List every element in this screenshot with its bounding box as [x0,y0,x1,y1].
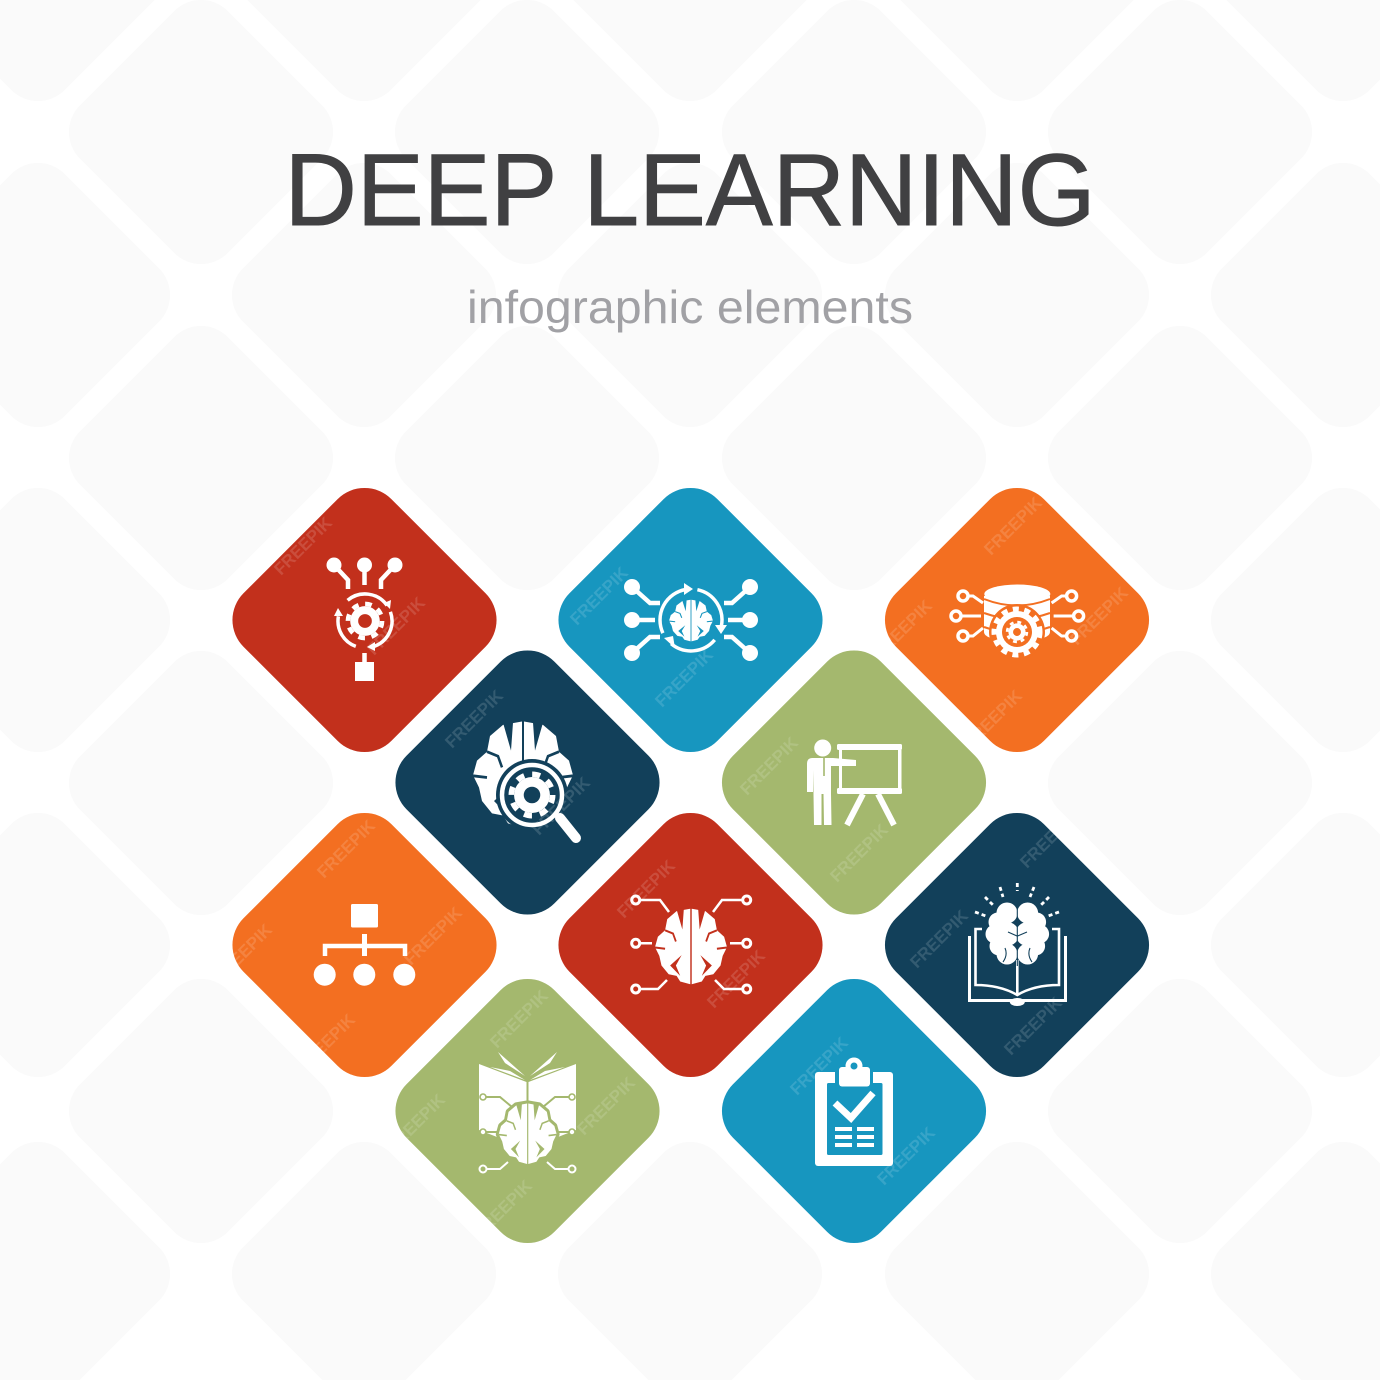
watermarks: FREEPIK [210,920,276,986]
watermarks: FREEPIK [313,816,379,882]
tile [706,635,1002,930]
watermarks: FREEPIK [1016,806,1082,872]
watermarks: FREEPIK [486,986,552,1052]
icon: brain under magnifier [473,721,576,838]
panel: dark brain book [869,797,1165,1093]
panel: green book brain [380,963,675,1259]
watermarks: FREEPIK [651,645,717,711]
panel: red process gear [217,472,512,768]
watermarks: FREEPIK [293,1010,359,1076]
panel: orange hierarchy [217,797,512,1093]
watermarks: FREEPIK [573,1073,639,1139]
watermarks: FREEPIK [870,596,936,662]
icon: brain over open book [970,883,1066,1006]
watermarks: FREEPIK [703,946,769,1012]
panel: dark brain search [380,635,675,930]
watermarks: FREEPIK [980,493,1046,559]
watermarks: FREEPIK [736,733,802,799]
panel: blue checklist [706,963,1002,1259]
watermarks: FREEPIK [566,563,632,629]
watermarks: FREEPIK [960,686,1026,752]
icon: brain with circuit lines [632,896,751,993]
tile [217,797,512,1093]
icon: gear with inputs and output [326,558,402,681]
tile [217,472,512,768]
icon: hierarchy chart [314,904,415,986]
watermarks: FREEPIK [906,906,972,972]
watermarks: FREEPIK [441,686,507,752]
panel: green presentation [706,635,1002,930]
watermarks: FREEPIK [786,1033,852,1099]
panel: orange database [869,472,1165,768]
tile [706,963,1002,1259]
watermarks: FREEPIK [826,820,892,886]
icon: presenter and board [807,740,902,825]
icon: clipboard checklist [815,1058,893,1166]
icon: brain cycle with nodes [624,579,758,661]
tile [869,472,1165,768]
watermarks: FREEPIK [873,1123,939,1189]
icon: database gear circuit [951,584,1084,660]
watermarks: FREEPIK [363,593,429,659]
subtitle: infographic elements [467,281,913,333]
watermarks: FREEPIK [1066,583,1132,649]
watermarks: FREEPIK [528,773,594,839]
tile [869,797,1165,1093]
watermarks: FREEPIK [613,856,679,922]
watermarks: FREEPIK [270,513,336,579]
watermarks: FREEPIK [1000,993,1066,1059]
watermarks [210,493,1132,1242]
watermarks: FREEPIK [470,1176,536,1242]
watermarks: FREEPIK [400,903,466,969]
icon: book with circuit brain [479,1052,576,1172]
watermarks: FREEPIK [383,1090,449,1156]
title: DEEP LEARNING [284,133,1096,247]
panel: blue neural brain [543,472,838,768]
tile [543,797,838,1093]
tile [380,635,675,930]
tile [543,472,838,768]
panel: red brain circuit [543,797,838,1093]
tile [380,963,675,1259]
